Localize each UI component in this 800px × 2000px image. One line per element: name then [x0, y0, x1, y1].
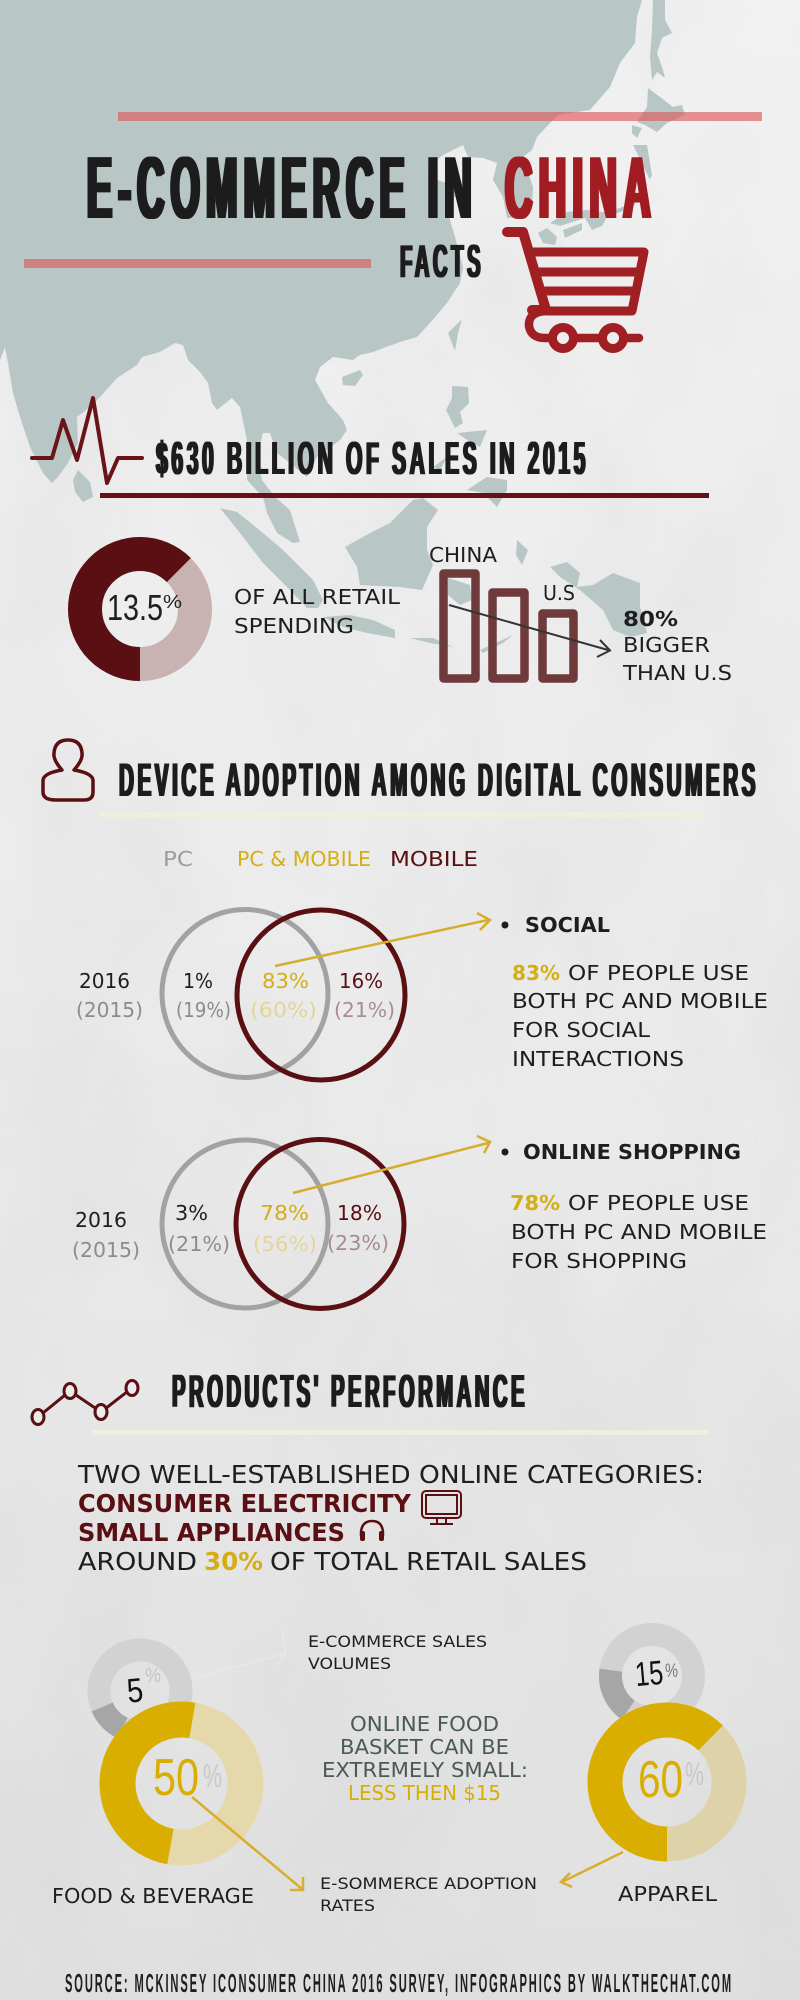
- venn diagram: online shopping: [72, 1136, 490, 1308]
- label: food and beverage: FOOD & BEVERAGE: [52, 1884, 254, 1908]
- heading underline: [100, 812, 707, 817]
- text: FACTS: [400, 235, 484, 287]
- left header decoration bar: [24, 259, 371, 268]
- text block: online shopping: [502, 1140, 767, 1273]
- venn diagram: social: 83%: [262, 969, 309, 993]
- text block: online shopping: BOTH PC AND MOBILE: [511, 1220, 767, 1244]
- text: 80 percent bigger than U.S: [622, 607, 732, 685]
- donut chart: 60 percent apparel: %: [685, 1756, 704, 1792]
- legend: [163, 847, 478, 871]
- text: of all retail spending: [234, 585, 401, 638]
- label: e-commerce adoption rates: E-SOMMERCE ADOPTION: [320, 1874, 537, 1893]
- venn diagram: online shopping: (56%): [253, 1232, 317, 1256]
- text block: social: BOTH PC AND MOBILE: [512, 989, 768, 1013]
- text block: social: [502, 913, 768, 1071]
- legend: PC: [163, 847, 193, 871]
- text: 80 percent bigger than U.S: BIGGER: [623, 633, 710, 657]
- arrow: [449, 605, 610, 657]
- bar chart: China vs U.S: CHINA: [429, 543, 497, 567]
- donut chart: 50 percent food and beverage: %: [203, 1758, 222, 1794]
- legend: MOBILE: [390, 847, 478, 871]
- label: 5 percent: 5: [125, 1671, 145, 1711]
- text: of all retail spending: SPENDING: [234, 614, 354, 638]
- label: e-commerce sales volumes: E-COMMERCE SALES: [308, 1632, 487, 1651]
- section 2: device adoption heading: [43, 740, 759, 817]
- top header decoration bar: [118, 112, 762, 121]
- heading underline: [92, 1430, 709, 1435]
- text block: online categories: [77, 1460, 704, 1576]
- icon: headphones: [360, 1521, 384, 1541]
- text: 80 percent bigger than U.S: THAN U.S: [622, 661, 732, 685]
- venn diagram: online shopping: 2016: [75, 1208, 127, 1232]
- venn diagram: social: (2015): [76, 998, 143, 1022]
- bar chart: China vs U.S: [429, 543, 610, 678]
- text block: online categories: AROUND: [78, 1547, 197, 1576]
- label: 15 percent: %: [665, 1661, 678, 1682]
- legend: PC & MOBILE: [237, 847, 371, 871]
- label: 15 percent: 15: [634, 1654, 665, 1694]
- section 1: sales: [32, 398, 709, 498]
- label: e-commerce adoption rates: RATES: [320, 1896, 375, 1915]
- text: of all retail spending: OF ALL RETAIL: [234, 585, 401, 609]
- venn diagram: online shopping: 3%: [175, 1201, 208, 1225]
- donut chart: 60 percent apparel: [605, 1720, 729, 1844]
- text block: online shopping: OF PEOPLE USE: [568, 1191, 749, 1215]
- label: e-commerce sales volumes: [308, 1632, 487, 1673]
- donut chart: 13.5 percent: 13.5: [107, 587, 163, 628]
- label: e-commerce adoption rates: [320, 1874, 537, 1915]
- text: 80 percent bigger than U.S: 80%: [623, 607, 678, 631]
- label: apparel: APPAREL: [618, 1882, 718, 1906]
- text block: online shopping: FOR SHOPPING: [511, 1249, 687, 1273]
- venn diagram: social: [76, 910, 490, 1080]
- donut chart: 15 percent e-commerce sales: [594, 1618, 710, 1734]
- venn diagram: online shopping: (2015): [72, 1238, 140, 1262]
- faint arrow to e-commerce sales volumes: [194, 1628, 286, 1678]
- label: 5 percent: %: [145, 1665, 161, 1687]
- arrow: [275, 913, 490, 966]
- venn diagram: social: (19%): [176, 998, 231, 1022]
- callout: online food basket: LESS THEN $15: [348, 1781, 501, 1805]
- text block: online shopping: 78%: [510, 1191, 560, 1215]
- label: 5 percent: [125, 1665, 161, 1711]
- label: e-commerce sales volumes: VOLUMES: [308, 1654, 391, 1673]
- callout: online food basket: BASKET CAN BE: [340, 1735, 509, 1759]
- donut chart: 50 percent food and beverage: 50: [153, 1749, 199, 1807]
- text block: online shopping: ONLINE SHOPPING: [523, 1140, 741, 1164]
- text block: social: OF PEOPLE USE: [568, 961, 749, 985]
- callout: online food basket: ONLINE FOOD: [350, 1712, 499, 1736]
- venn diagram: online shopping: (23%): [327, 1231, 389, 1255]
- text block: social: SOCIAL: [525, 913, 610, 937]
- arrow: [293, 1136, 490, 1193]
- venn diagram: social: (60%): [250, 998, 317, 1022]
- background map of Asia: [0, 0, 685, 653]
- icon: person: [43, 740, 93, 800]
- donut chart: 50 percent food and beverage: [107, 1709, 256, 1858]
- text block: online categories: TWO WELL-ESTABLISHED ONLINE CATEGORIES:: [77, 1460, 704, 1489]
- text block: online categories: CONSUMER ELECTRICITY: [78, 1489, 412, 1518]
- text block: social: 83%: [512, 961, 560, 985]
- icon: monitor: [422, 1491, 461, 1524]
- donut chart: 13.5 percent: %: [163, 592, 182, 612]
- icon: heartbeat: [32, 398, 142, 483]
- donut chart: 60 percent apparel: 60: [638, 1751, 683, 1809]
- text block: social: INTERACTIONS: [512, 1047, 684, 1071]
- venn diagram: social: 1%: [183, 969, 213, 993]
- text block: social: FOR SOCIAL: [512, 1018, 651, 1042]
- icon: shopping cart: [507, 232, 644, 348]
- section 3: products performance heading: [32, 1365, 709, 1435]
- venn diagram: online shopping: 78%: [260, 1201, 309, 1225]
- arrow: apparel to adoption rates: [561, 1852, 623, 1887]
- icon: line chart: [32, 1380, 138, 1424]
- venn diagram: online shopping: (21%): [168, 1232, 230, 1256]
- venn diagram: social: 2016: [79, 969, 130, 993]
- text block: online categories: SMALL APPLIANCES: [78, 1518, 345, 1547]
- bar chart: China vs U.S: U.S: [543, 581, 575, 605]
- text block: online categories: OF TOTAL RETAIL SALES: [270, 1547, 587, 1576]
- text block: online categories: 30%: [204, 1547, 263, 1576]
- donut chart: 13.5 percent: [85, 554, 195, 664]
- arrow: food to adoption rates: [192, 1797, 303, 1890]
- heading underline: [100, 493, 709, 498]
- donut chart: 5 percent e-commerce sales: [86, 1637, 194, 1745]
- venn diagram: social: (21%): [334, 998, 395, 1022]
- callout: online food basket: EXTREMELY SMALL:: [322, 1758, 528, 1782]
- callout: online food basket: [322, 1712, 528, 1805]
- venn diagram: social: 16%: [339, 969, 383, 993]
- venn diagram: online shopping: 18%: [337, 1201, 382, 1225]
